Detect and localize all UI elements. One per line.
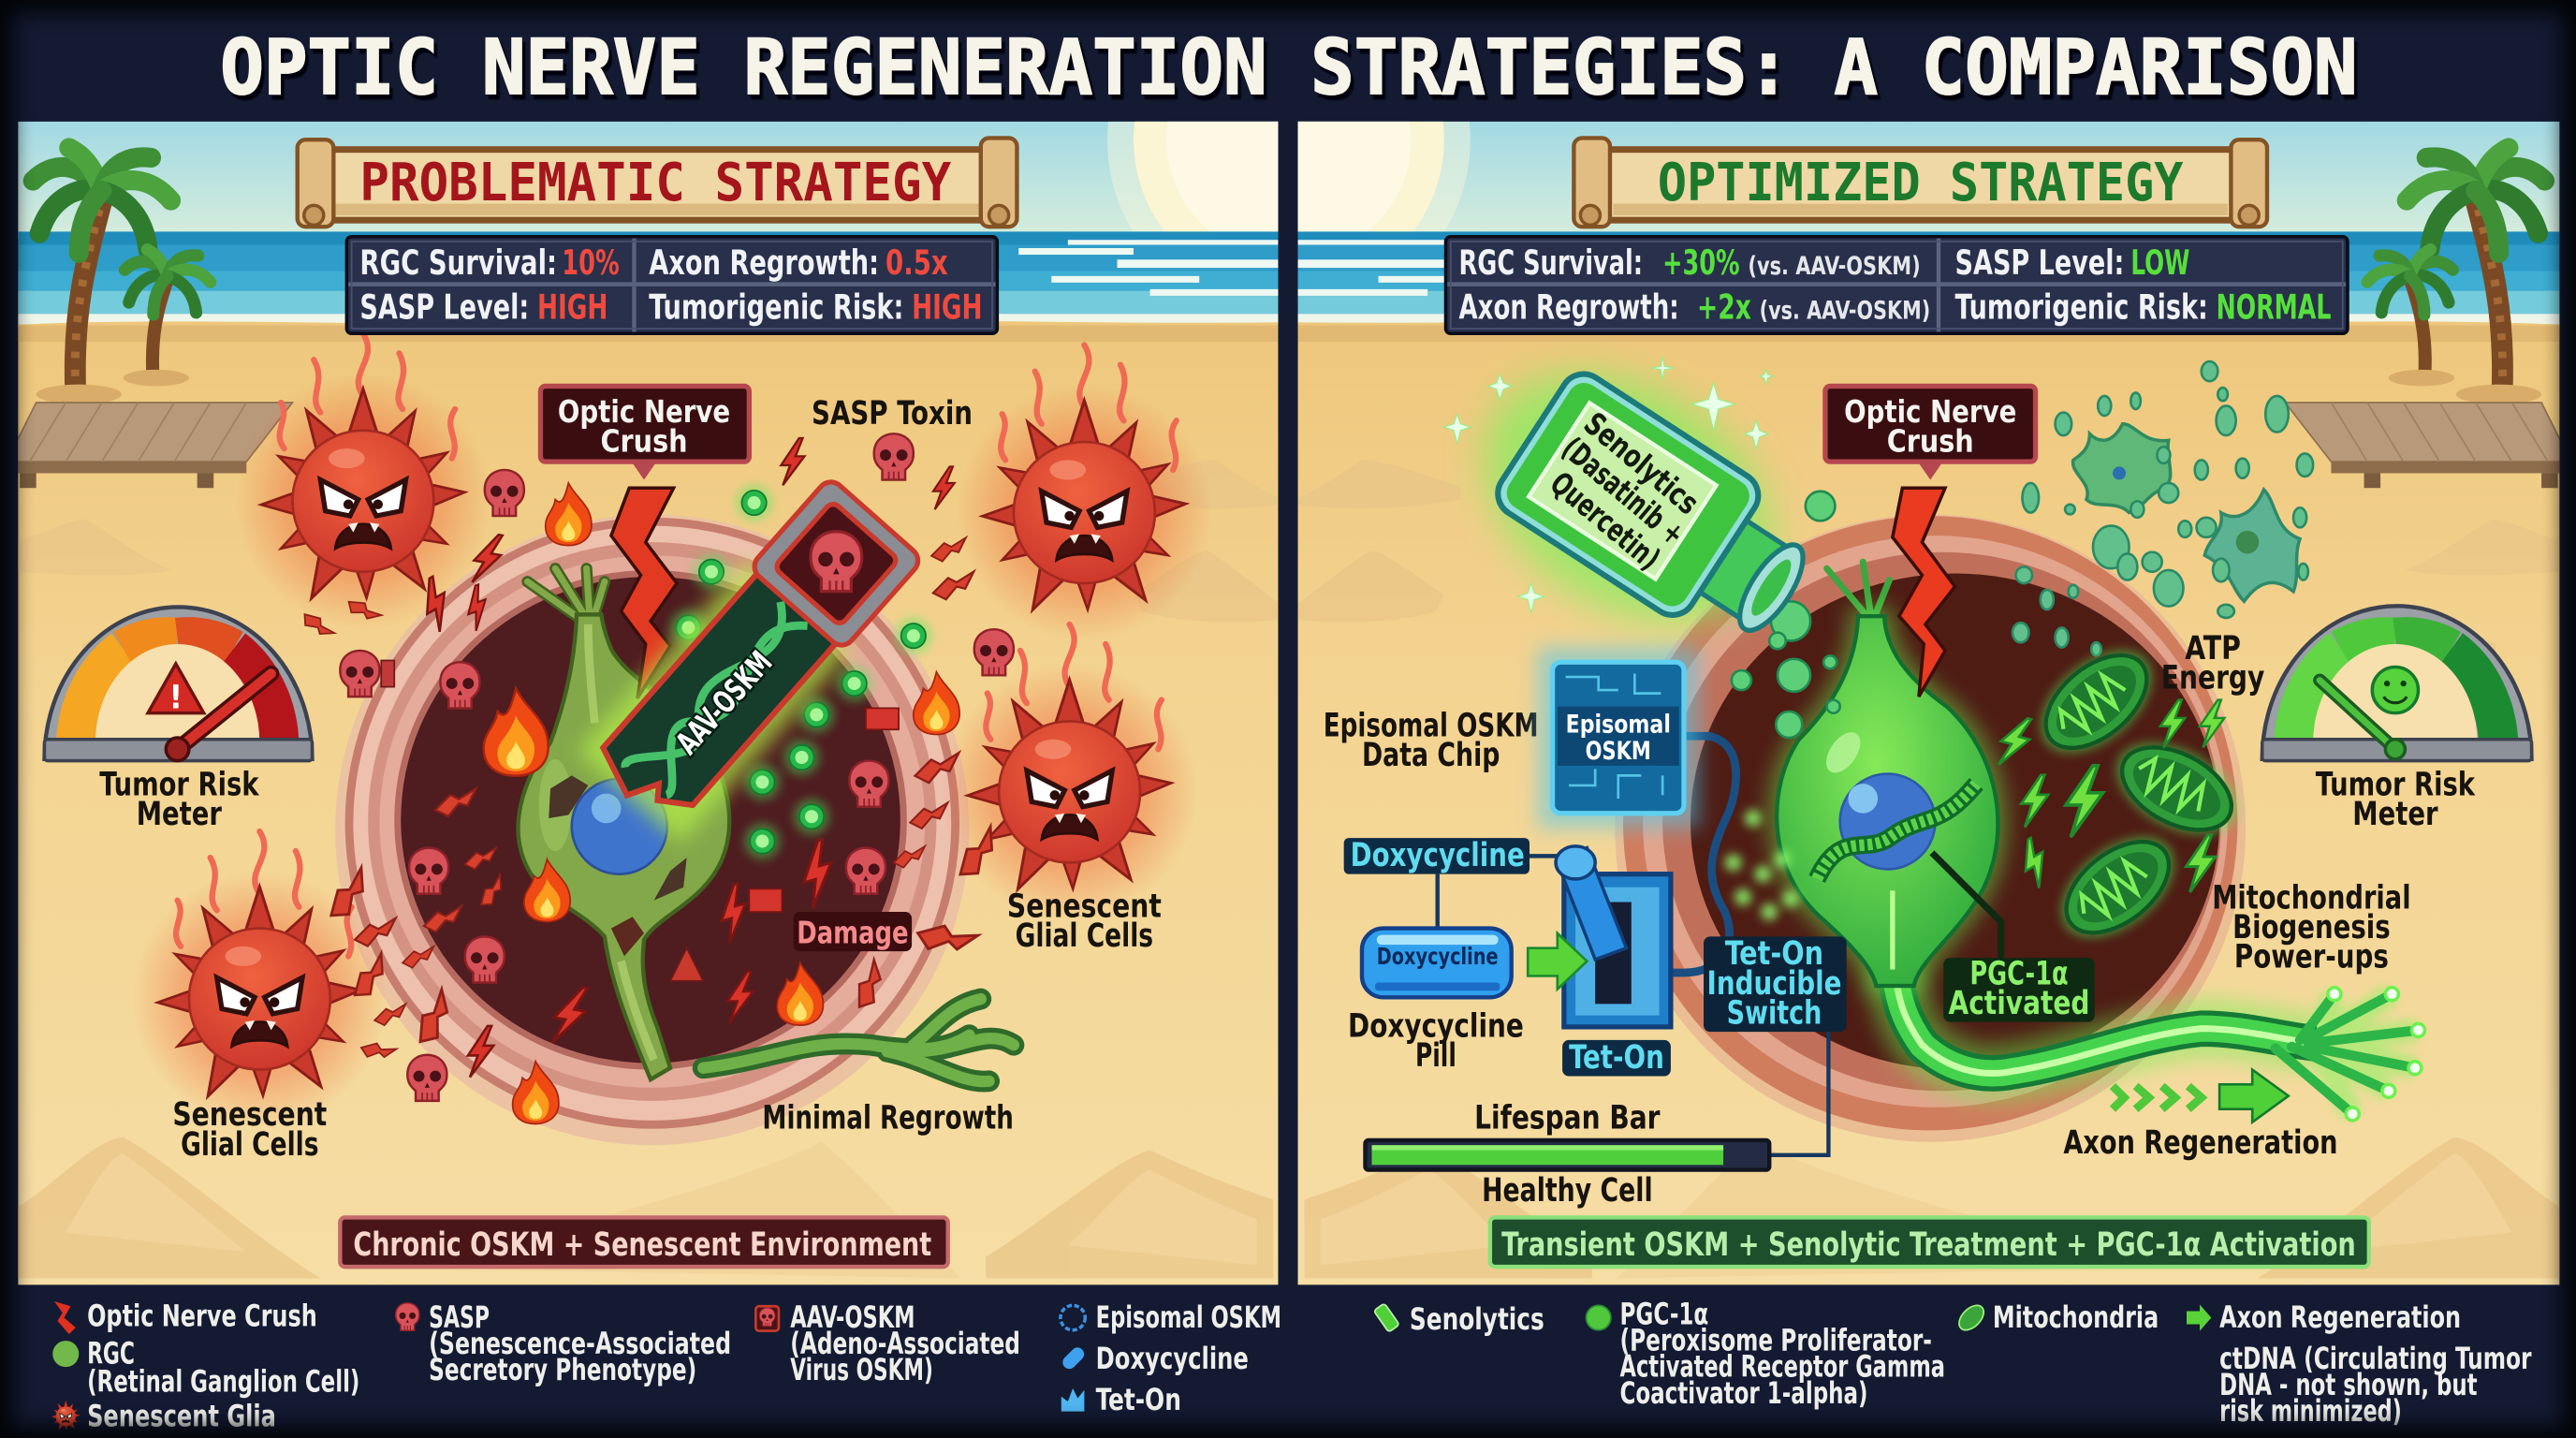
legend: PGC-1 alpha: (Peroxisome Proliferator- [1620, 1325, 1932, 1358]
legend: mitochondria: Mitochondria [1993, 1301, 2159, 1335]
label: mitochondrial power-ups [2212, 879, 2411, 976]
legend: ctDNA note [2219, 1343, 2532, 1429]
legend: AAV-OSKM: (Adeno-Associated [790, 1328, 1020, 1361]
episomal OSKM chip [1538, 647, 1699, 829]
label: episomal data chip: Episomal OSKM [1324, 706, 1539, 744]
stats panel: optimized: +30% [1662, 242, 1740, 283]
legend: PGC-1 alpha: Coactivator 1-alpha) [1620, 1377, 1868, 1411]
stats panel: optimized: Tumorigenic Risk: [1955, 286, 2208, 327]
leader line doxycycline [1438, 856, 1580, 930]
PGC-1 alpha leader line [1932, 853, 2001, 960]
legend: PGC-1 alpha: Activated Receptor Gamma [1620, 1351, 1945, 1385]
label: tumor risk meter [99, 765, 259, 833]
label: tumor risk meter: Tumor Risk [99, 765, 259, 803]
stats panel: problematic: Tumorigenic Risk: [649, 286, 903, 327]
senolytics vial: Quercetin) [1544, 464, 1667, 577]
legend: episomal doxycycline tet-on: Episomal OSKM [1096, 1301, 1281, 1335]
label: mitochondrial power-ups: Mitochondrial [2212, 879, 2411, 917]
label: PGC-1 alpha activated: PGC-1α [1969, 954, 2069, 992]
banner: chronic OSKM: Chronic OSKM + Senescent Environment [353, 1225, 931, 1264]
label: tumor risk meter: Meter [137, 795, 222, 833]
legend: mitochondria [1954, 1301, 2159, 1335]
legend: PGC-1 alpha: PGC-1α [1620, 1299, 1708, 1332]
label: senescent glial cells left [172, 1095, 327, 1164]
stats panel: problematic [346, 237, 997, 333]
stats panel: optimized: Axon Regrowth: [1459, 286, 1679, 327]
label: mitochondrial power-ups: Biogenesis [2232, 908, 2391, 946]
legend: AAV-OSKM: AAV-OSKM [790, 1301, 915, 1335]
label: ATP energy [2161, 629, 2265, 697]
legend: crush rgc glia: RGC [87, 1338, 135, 1372]
dissolving senescent cells [2012, 361, 2313, 655]
doxycycline pill: Doxycycline [1377, 943, 1499, 970]
banner: transient OSKM: Transient OSKM + Senolytic Treatment + PGC-1α Activation [1501, 1225, 2356, 1264]
mitochondria [2021, 629, 2253, 959]
legend: axon regeneration: Axon Regeneration [2219, 1301, 2461, 1335]
red skulls [340, 433, 1014, 1101]
senolytics vial: Senolytics [1577, 405, 1706, 521]
label: ATP energy: ATP [2185, 629, 2241, 668]
senescent glial cell top left [245, 335, 481, 620]
banner: chronic OSKM [340, 1217, 948, 1267]
stats panel: optimized: SASP Level: [1955, 242, 2124, 283]
legend: crush rgc glia: Optic Nerve Crush [87, 1299, 317, 1333]
stats panel: optimized: +2x [1697, 286, 1751, 327]
label: lifespan bar: Lifespan Bar [1474, 1099, 1661, 1137]
label: tet-on inducible switch [1704, 934, 1847, 1032]
beach backdrop right [1116, 0, 2576, 1314]
tet-on switch [1556, 846, 1671, 1027]
green particles [670, 485, 931, 859]
label: healthy cell: Healthy Cell [1482, 1171, 1653, 1210]
leader line: switch to lifespan [1771, 1032, 1828, 1155]
label: episomal data chip [1324, 706, 1539, 774]
sparkles [1444, 357, 1773, 613]
axon direction arrow [2113, 1070, 2289, 1123]
label: PGC-1 alpha activated: Activated [1949, 984, 2089, 1022]
label: senescent glial cells left: Glial Cells [181, 1125, 319, 1164]
legend: crush rgc glia: Senescent Glia [87, 1400, 276, 1433]
label: senescent glial cells right [1007, 887, 1162, 955]
label: tumor risk meter [2316, 765, 2476, 833]
scroll header: problematic: PROBLEMATIC STRATEGY [359, 153, 951, 213]
legend: SASP [396, 1301, 731, 1387]
label: doxycycline pill: Pill [1415, 1036, 1456, 1075]
stats panel: optimized: RGC Survival: [1459, 242, 1643, 283]
legend: crush rgc glia: (Retinal Ganglion Cell) [87, 1366, 359, 1400]
stats panel: problematic: Axon Regrowth: [649, 242, 879, 283]
episomal OSKM chip: OSKM [1586, 738, 1651, 766]
legend: senolytics: Senolytics [1410, 1303, 1544, 1337]
label: tumor risk meter: Meter [2352, 795, 2438, 833]
label: episomal data chip: Data Chip [1362, 736, 1500, 774]
panel: optimized strategy [1116, 0, 2576, 1314]
stats panel: optimized: (vs. AAV-OSKM) [1748, 253, 1921, 281]
glowing particles by cell [1725, 810, 1799, 920]
callout: optic nerve crush: Optic Nerve [1844, 393, 2016, 430]
damaged retinal ganglion cell [519, 568, 729, 1079]
scroll header: problematic [298, 138, 1017, 227]
legend: SASP: (Senescence-Associated [429, 1328, 731, 1361]
banner: transient OSKM [1490, 1217, 2369, 1267]
callout: optic nerve crush: Crush [1887, 423, 1974, 460]
scroll header: optimized: OPTIMIZED STRATEGY [1658, 153, 2184, 213]
callout: optic nerve crush [1825, 386, 2036, 479]
legend: ctDNA note: risk minimized) [2219, 1395, 2402, 1429]
label: PGC-1 alpha activated [1943, 954, 2095, 1022]
green arrow to switch [1528, 933, 1587, 990]
stats panel: problematic: HIGH [912, 286, 983, 327]
tumor risk meter right [2262, 606, 2532, 761]
tumor risk meter left: ! [169, 678, 183, 716]
label: senescent glial cells right: Glial Cells [1016, 917, 1153, 955]
label: SASP toxin: SASP Toxin [812, 394, 973, 433]
callout: optic nerve crush [540, 386, 749, 479]
tumor risk meter left [44, 607, 313, 761]
stats panel: optimized: LOW [2130, 242, 2190, 283]
label: tet-on inducible switch: Tet-On [1725, 934, 1823, 973]
senolytic droplets [1732, 492, 1840, 738]
scroll header: optimized [1573, 138, 2267, 227]
damaged retina ring [335, 514, 970, 1145]
label: senescent glial cells left: Senescent [172, 1095, 327, 1134]
label: tet-on inducible switch: Inducible [1707, 964, 1841, 1003]
legend: PGC-1 alpha [1587, 1299, 1945, 1411]
AAV-OSKM capsule: AAV-OSKM [668, 644, 779, 761]
cable from chip to switch [1671, 736, 1736, 973]
senescent glial cell mid right [955, 622, 1189, 911]
lifespan bar [1365, 1140, 1769, 1170]
regrowth axon [703, 999, 1014, 1081]
label: tet-on tag: Tet-On [1569, 1038, 1664, 1077]
legend: SASP: Secretory Phenotype) [429, 1354, 696, 1387]
label: tet-on inducible switch: Switch [1727, 993, 1822, 1032]
label: axon regeneration: Axon Regeneration [2063, 1123, 2337, 1162]
beach backdrop left [18, 122, 1279, 1284]
stats panel: optimized: NORMAL [2217, 286, 2331, 327]
AAV-OSKM capsule [578, 472, 929, 844]
senolytics vial: (Dasatinib + [1555, 430, 1691, 552]
episomal OSKM chip: Episomal [1566, 712, 1671, 740]
label: minimal regrowth: Minimal Regrowth [762, 1099, 1014, 1137]
stats panel: problematic: 0.5x [886, 242, 948, 283]
stats panel: optimized [1445, 237, 2348, 333]
legend: ctDNA note: DNA - not shown, but [2219, 1369, 2478, 1402]
callout: optic nerve crush: Optic Nerve [558, 393, 730, 430]
label: tumor risk meter: Tumor Risk [2316, 765, 2476, 803]
panel: problematic strategy [18, 122, 1279, 1284]
stats panel: problematic: RGC Survival: [359, 242, 557, 283]
label: senescent glial cells right: Senescent [1007, 887, 1162, 925]
optic nerve crush lightning [1893, 488, 1955, 697]
stats panel: optimized: (vs. AAV-OSKM) [1760, 297, 1930, 325]
senescent glial cell bottom left [131, 831, 388, 1127]
senescent glial cell top right [956, 345, 1212, 640]
regenerating retinal ganglion cell [1777, 562, 1998, 986]
legend: crush rgc glia [51, 1299, 359, 1433]
label: mitochondrial power-ups: Power-ups [2234, 938, 2389, 976]
stats panel: problematic: SASP Level: [359, 286, 529, 327]
title: OPTIC NERVE REGENERATION STRATEGIES: A COMPARISON [220, 24, 2358, 112]
label: doxycycline tag: Doxycycline [1351, 836, 1525, 874]
energy bolts [1995, 700, 2224, 892]
stats panel: problematic: HIGH [537, 286, 607, 327]
legend: AAV-OSKM [755, 1301, 1020, 1387]
flames [484, 483, 959, 1123]
label: ATP energy: Energy [2161, 658, 2265, 697]
senolytics vial [1438, 322, 1832, 674]
legend: SASP: SASP [429, 1301, 490, 1335]
stats panel: problematic: 10% [562, 242, 620, 283]
doxycycline pill [1362, 929, 1512, 997]
legend: episomal doxycycline tet-on: Tet-On [1096, 1384, 1181, 1417]
legend: episomal doxycycline tet-on [1060, 1301, 1281, 1417]
legend: AAV-OSKM: Virus OSKM) [790, 1354, 933, 1387]
scattered damage bolts [300, 438, 1007, 1078]
label: doxycycline pill [1348, 1006, 1524, 1075]
optic nerve crush lightning [611, 488, 677, 698]
healing retina ring [1615, 514, 2246, 1142]
label: doxycycline pill: Doxycycline [1348, 1006, 1524, 1045]
axon [1895, 962, 2424, 1121]
callout: optic nerve crush: Crush [601, 423, 688, 460]
label: damage: Damage [797, 914, 909, 950]
legend: episomal doxycycline tet-on: Doxycycline [1096, 1343, 1249, 1376]
